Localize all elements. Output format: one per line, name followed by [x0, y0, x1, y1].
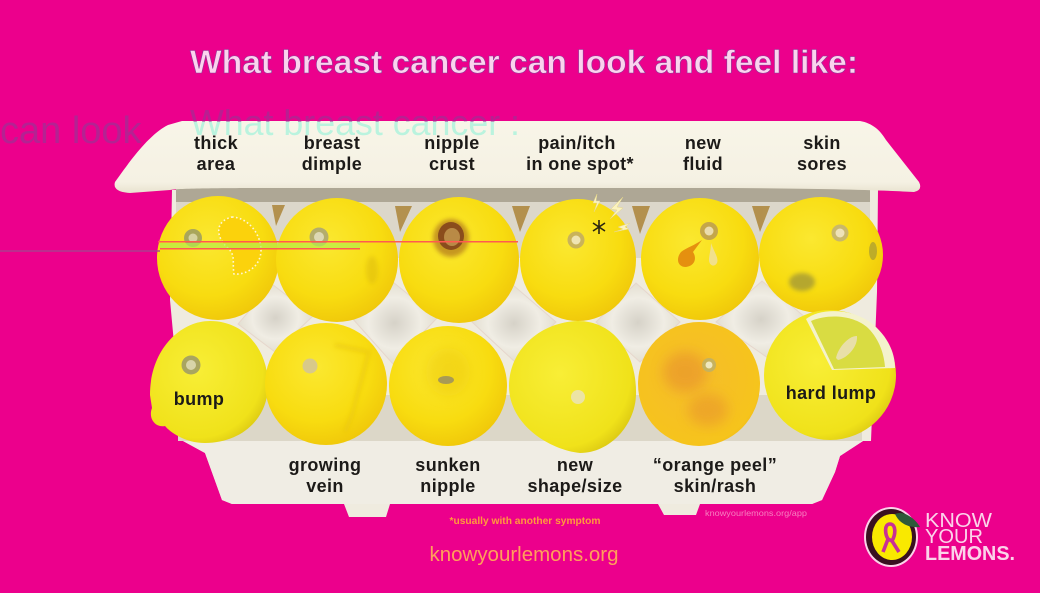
bottom labels: shape/size [527, 476, 623, 496]
top labels: thick [194, 133, 239, 153]
lemon: nipple crust [399, 197, 519, 323]
logo [864, 507, 1015, 567]
top labels: new [685, 133, 722, 153]
egg cups [238, 281, 806, 364]
label: bump: bump [174, 389, 224, 409]
logo wordmark [925, 510, 1015, 565]
lemon: hard lump [764, 310, 896, 440]
egg carton [115, 121, 920, 517]
title: What breast cancer can look and feel like: [190, 44, 858, 80]
top labels: fluid [683, 154, 723, 174]
carton body [170, 190, 878, 517]
top labels: skin [803, 133, 841, 153]
lemon: skin sores [759, 197, 883, 313]
carton front lip [183, 441, 863, 504]
ghost headline upper: What breast cancer : [190, 102, 520, 143]
brown shadows behind lemons [272, 205, 770, 234]
lemon: new fluid [641, 198, 759, 320]
top row lemons [157, 194, 883, 323]
lemon slice cutaway [806, 311, 895, 370]
glitch streak [0, 241, 518, 252]
carton back band [176, 188, 870, 258]
bottom labels: new [557, 455, 594, 475]
seed [836, 336, 857, 360]
lemon: sunken nipple [389, 326, 507, 446]
logo lemon icon [864, 507, 920, 567]
logo wordmark: YOUR [925, 526, 983, 548]
top labels: pain/itch [538, 133, 616, 153]
lemon: pain/itch [520, 194, 636, 321]
top labels: in one spot* [526, 154, 634, 174]
top labels [194, 133, 847, 174]
bottom labels: sunken [415, 455, 481, 475]
bottom labels: growing [289, 455, 361, 475]
label: hard lump: hard lump [786, 383, 876, 403]
carton floor [178, 395, 862, 441]
lemon: bump [150, 321, 268, 443]
lemon: new shape/size [509, 321, 636, 453]
lemon: growing vein [265, 323, 387, 445]
bottom labels: “orange peel” [653, 455, 777, 475]
top labels: breast [304, 133, 360, 153]
carton lid [115, 121, 920, 193]
logo wordmark: LEMONS. [925, 543, 1015, 565]
bottom labels: skin/rash [674, 476, 756, 496]
icon: orange fluid drop [678, 240, 702, 267]
top labels: crust [429, 154, 475, 174]
app url: knowyourlemons.org/app [705, 508, 807, 518]
icon: pale fluid drop [709, 243, 717, 266]
lemon: orange peel [638, 322, 760, 446]
top labels: dimple [302, 154, 362, 174]
website url: knowyourlemons.org [430, 544, 618, 566]
bottom labels: vein [306, 476, 344, 496]
logo wordmark: KNOW [925, 510, 992, 532]
icon: asterisk [593, 220, 605, 234]
lemon: breast dimple [276, 198, 398, 322]
top labels: area [197, 154, 236, 174]
top labels: sores [797, 154, 847, 174]
logo ribbon [883, 524, 899, 552]
ghost headline on lid: What breast cancer : [190, 102, 520, 143]
top labels: nipple [424, 133, 480, 153]
ghost line left: can look and feel like: [0, 110, 365, 152]
footnote: *usually with another symptom [450, 515, 600, 527]
lemon: thick area [157, 196, 279, 320]
bottom labels: nipple [420, 476, 476, 496]
bottom row lemons [150, 310, 896, 453]
glitch ghost text [2, 109, 517, 144]
icon: lightning bolts [593, 194, 630, 232]
bottom labels [289, 455, 777, 496]
